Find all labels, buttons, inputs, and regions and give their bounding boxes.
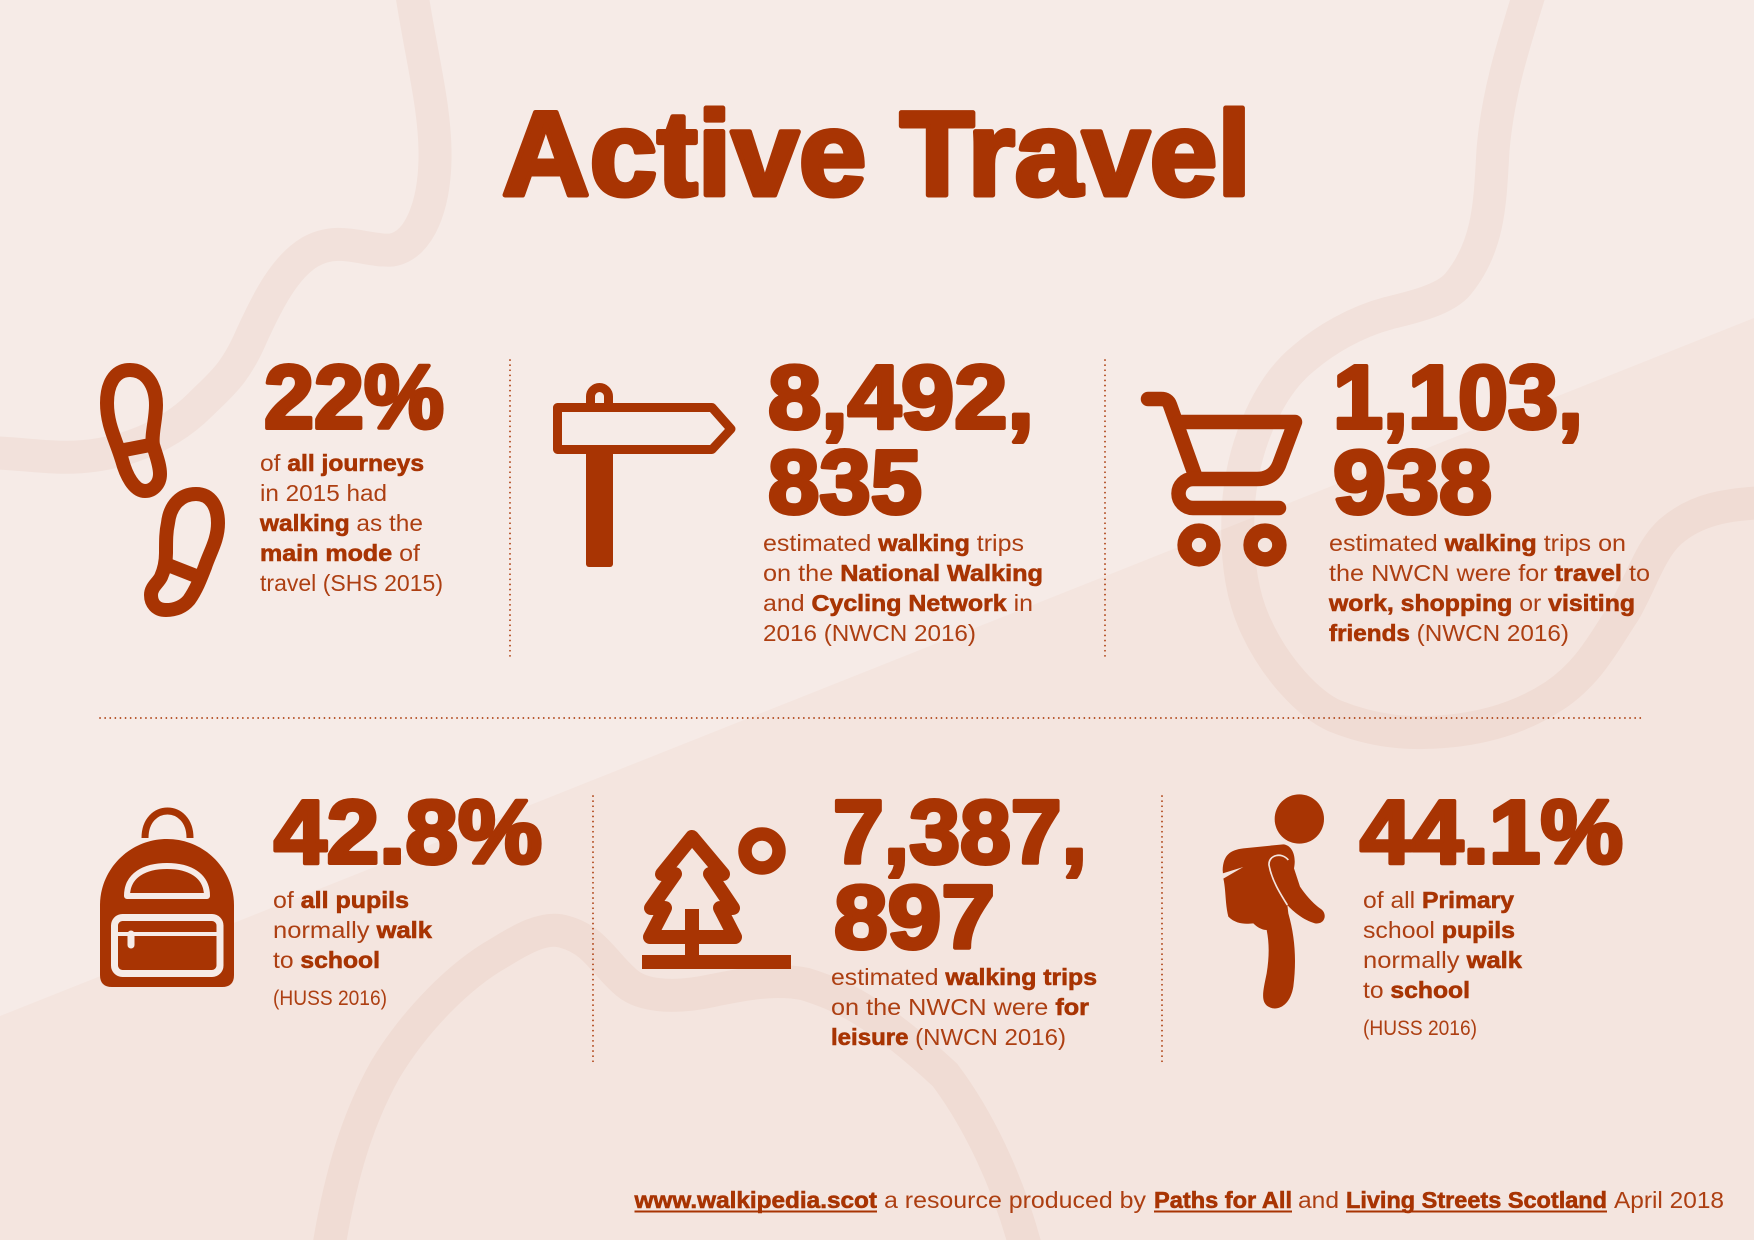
panel: 22% of journeys (107, 348, 444, 610)
statistic: 7,387,897 (833, 783, 1087, 968)
text: 22% description: in 2015 had (260, 480, 387, 506)
text: primary pupils description: (HUSS 2016) (1363, 1017, 1477, 1040)
icon: shopping cart (1148, 399, 1295, 559)
text: leisure description: estimated walking trips (831, 964, 1097, 990)
text: primary pupils description (1363, 887, 1522, 1040)
text: pupils description: (HUSS 2016) (273, 987, 387, 1010)
text: travel description (1328, 530, 1650, 646)
text: network description (763, 530, 1043, 646)
text: pupils description (273, 887, 432, 1010)
text: network description: and Cycling Network in (763, 590, 1033, 616)
footer credits (633, 1187, 1724, 1213)
text: pupils description: of all pupils (273, 887, 409, 913)
panel: 44.1% of primary pupils (1223, 783, 1623, 1040)
text: leisure description: leisure (NWCN 2016) (831, 1024, 1066, 1050)
text: 22% description: main mode of (260, 540, 421, 566)
text: primary pupils description: normally walk (1363, 947, 1522, 973)
icon: signpost (558, 388, 731, 567)
statistic: 8,492,835 (768, 348, 1034, 533)
text: primary pupils description: to school (1363, 977, 1470, 1003)
statistic: 7,387,897: 897 (834, 868, 995, 968)
footer credits: www.walkipedia.scot (633, 1187, 877, 1213)
footer credits: a resource produced by (884, 1187, 1147, 1213)
text: 22% description: travel (SHS 2015) (260, 570, 443, 596)
text: 22% description: of all journeys (260, 450, 424, 476)
statistic: 22%: 22% (264, 348, 444, 448)
text: pupils description: normally walk (273, 917, 432, 943)
statistic: 8,492,835: 835 (768, 433, 922, 533)
statistic: 1,103,938: 938 (1333, 433, 1492, 533)
icon: child with backpack (1223, 794, 1325, 1008)
panel: travel trips (1148, 348, 1650, 646)
statistic: 44.1%: 44.1% (1360, 783, 1623, 883)
footer credits: April 2018 (1614, 1187, 1724, 1213)
icon: footprints (107, 370, 218, 610)
footer credits: and (1298, 1187, 1339, 1213)
text: leisure description (831, 964, 1097, 1050)
panel: leisure trips (642, 783, 1097, 1050)
text: travel description: friends (NWCN 2016) (1329, 620, 1569, 646)
text: travel description: the NWCN were for travel to (1329, 560, 1650, 586)
statistic: 42.8%: 42.8% (274, 783, 542, 883)
text: primary pupils description: of all Primary (1363, 887, 1514, 913)
text: network description: estimated walking trips (763, 530, 1024, 556)
text: leisure description: on the NWCN were for (831, 994, 1089, 1020)
text: primary pupils description: school pupils (1363, 917, 1515, 943)
text: network description: 2016 (NWCN 2016) (763, 620, 976, 646)
title: Active Travel (502, 87, 1251, 221)
statistic: 1,103,938: 1,103, (1333, 348, 1583, 448)
statistic: 7,387,897: 7,387, (833, 783, 1087, 883)
icon: backpack (100, 811, 234, 987)
footer credits: Living Streets Scotland (1346, 1187, 1607, 1213)
text: travel description: estimated walking trips on (1329, 530, 1626, 556)
footer credits: Paths for All (1154, 1187, 1292, 1213)
statistic: 1,103,938 (1333, 348, 1583, 533)
panel: 42.8% of pupils (100, 783, 542, 1010)
text: travel description: work, shopping or visiting (1328, 590, 1635, 616)
text: 22% description: walking as the (259, 510, 423, 536)
text: 22% description (259, 450, 443, 596)
icon: tree and sun (642, 834, 791, 969)
text: pupils description: to school (273, 947, 380, 973)
statistic: 8,492,835: 8,492, (768, 348, 1034, 448)
panel: National Walking and Cycling Network trips (558, 348, 1043, 646)
text: network description: on the National Walking (763, 560, 1043, 586)
